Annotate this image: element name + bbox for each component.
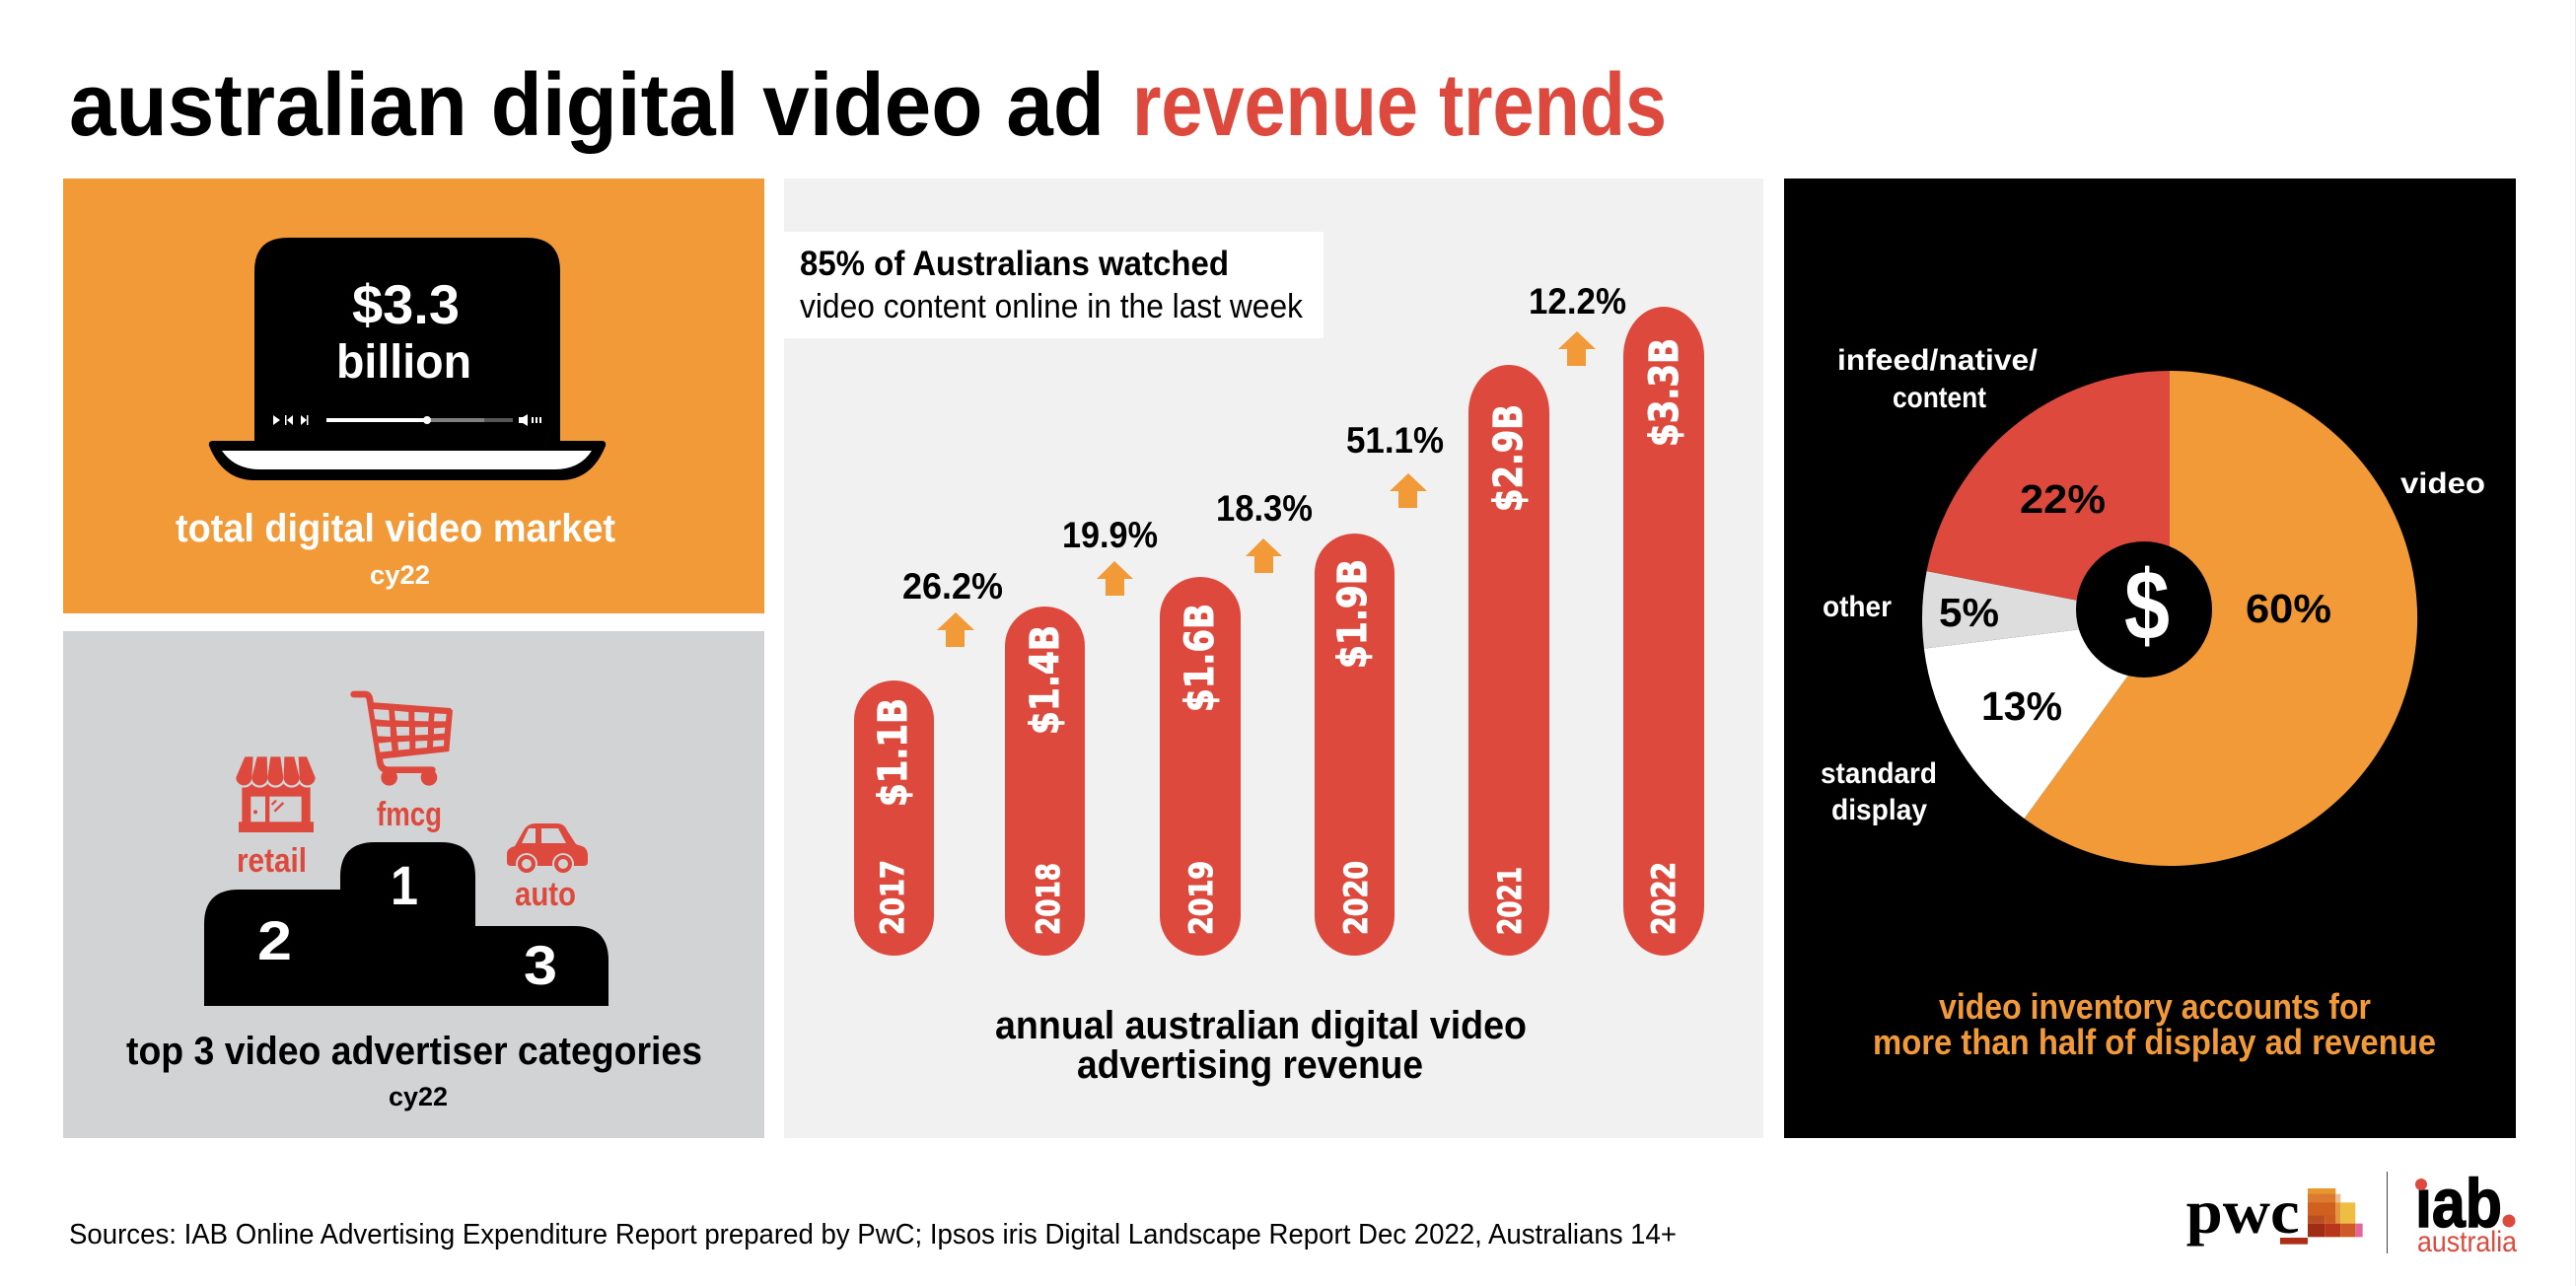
bar 2021: $2.9B	[1486, 404, 1532, 512]
bar 2017: $1.1B	[871, 698, 916, 807]
bar 2021: 2021	[1491, 867, 1529, 935]
panel heading: top 3 video advertiser categories	[126, 1030, 702, 1073]
bar 2018	[1005, 607, 1085, 956]
growth 12.2%	[1529, 281, 1626, 366]
logo: iab australia: australia	[2417, 1226, 2517, 1258]
growth 19.9%	[1062, 515, 1158, 596]
title	[69, 56, 1667, 155]
bar 2020: $1.9B	[1330, 559, 1376, 669]
pie chart: $	[2124, 550, 2170, 661]
panel heading: total digital video market	[176, 507, 615, 550]
chart heading	[995, 1004, 1527, 1087]
pie chart	[1922, 371, 2417, 866]
callout: 85% of Australians: video content online in the last week	[800, 288, 1304, 325]
period label: cy22	[389, 1082, 448, 1111]
icon: laptop with video player	[209, 238, 606, 480]
growth 12.2%: 12.2%	[1529, 281, 1626, 322]
market value	[336, 273, 471, 389]
bar 2019: $1.6B	[1178, 604, 1223, 712]
pie chart: 22%	[2020, 476, 2106, 522]
growth 51.1%: 51.1%	[1346, 420, 1444, 461]
bar 2022: 2022	[1645, 862, 1682, 935]
pie label: infeed/native/content: infeed/native/	[1837, 344, 2039, 377]
pie label: video: video	[2400, 467, 2485, 500]
podium	[204, 842, 608, 1006]
icon: retail store	[234, 756, 319, 832]
callout: 85% of Australians	[784, 232, 1324, 338]
bar 2019	[1160, 577, 1241, 956]
logo: pwc: pwc	[2186, 1178, 2300, 1247]
pie label: standard display: display	[1831, 794, 1927, 826]
pie label: infeed/native/content: content	[1893, 382, 1986, 414]
pie label: standard display	[1821, 757, 1937, 826]
podium: 2	[257, 909, 292, 971]
growth 19.9%: 19.9%	[1062, 515, 1158, 555]
pie label: other: other	[1823, 591, 1892, 623]
bar 2018: 2018	[1030, 863, 1067, 935]
icon: shopping cart	[354, 694, 453, 786]
podium: 3	[524, 934, 557, 996]
chart heading: advertising revenue	[1077, 1043, 1423, 1087]
bar 2019: 2019	[1182, 861, 1220, 935]
chart heading: annual australian digital video	[995, 1004, 1527, 1047]
panel: total digital video market	[63, 179, 764, 613]
podium: 1	[391, 854, 418, 916]
title: revenue trends	[1132, 56, 1667, 155]
market value: $3.3	[352, 273, 460, 335]
logo: pwc	[2186, 1178, 2363, 1247]
pie label: infeed/native/content	[1837, 344, 2039, 414]
bar 2021	[1468, 365, 1549, 956]
sources footnote: Sources: IAB Online Advertising Expenditure Report prepared by PwC; Ipsos iris Digital Landscape Report Dec 2022, Australians 14+	[69, 1219, 1677, 1250]
bar chart	[854, 307, 1704, 956]
growth 26.2%: 26.2%	[902, 566, 1003, 607]
panel caption: more than half of display ad revenue	[1873, 1022, 2436, 1062]
panel caption	[1873, 986, 2436, 1062]
growth 18.3%: 18.3%	[1216, 488, 1313, 529]
category label: retail: retail	[237, 842, 307, 880]
panel: display ad revenue share	[1784, 179, 2516, 1138]
bar 2020	[1315, 534, 1395, 956]
bar 2017	[854, 680, 934, 956]
bar 2022: $3.3B	[1642, 338, 1687, 447]
icon: car	[507, 823, 588, 875]
growth 18.3%	[1216, 488, 1313, 573]
growth 51.1%	[1346, 420, 1444, 508]
panel caption: video inventory accounts for	[1939, 986, 2371, 1027]
callout: 85% of Australians: 85% of Australians watched	[800, 245, 1229, 283]
pie label: standard display: standard	[1821, 757, 1937, 790]
bar 2018: $1.4B	[1023, 625, 1068, 735]
growth 26.2%	[902, 566, 1003, 647]
panel: top 3 video advertiser categories	[63, 631, 764, 1138]
category label: auto: auto	[515, 876, 576, 913]
period label: cy22	[370, 560, 430, 590]
logo: iab australia: ıab	[2415, 1165, 2502, 1242]
pie chart: 5%	[1939, 590, 1999, 635]
bar 2020: 2020	[1337, 861, 1375, 935]
title: australian digital video ad	[69, 56, 1105, 155]
market value: billion	[336, 336, 471, 389]
panel: annual revenue chart	[784, 179, 1763, 1138]
bar 2017: 2017	[874, 860, 911, 935]
category label: fmcg: fmcg	[377, 796, 442, 833]
pie chart: 60%	[2246, 586, 2331, 631]
bar 2022	[1623, 307, 1704, 956]
pie chart: 13%	[1981, 683, 2062, 729]
